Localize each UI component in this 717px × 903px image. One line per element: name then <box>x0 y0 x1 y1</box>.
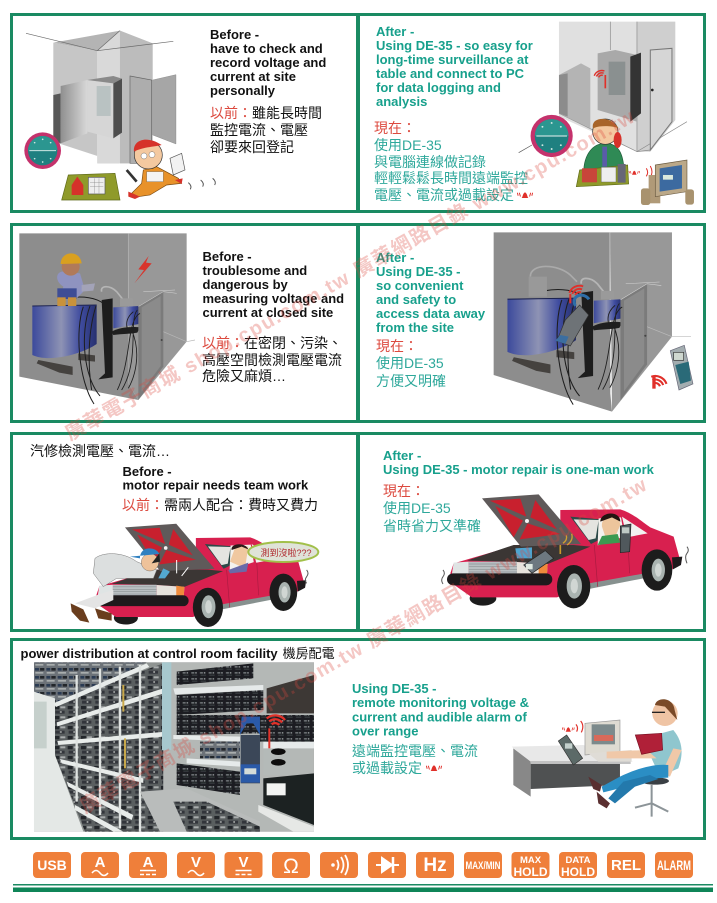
chinese description: 省時省力又準確 <box>383 518 481 534</box>
heading: after, convenient and safe: and safety to <box>376 292 456 307</box>
heading: after, convenient and safe: After - <box>376 250 414 265</box>
watermark: lower diagonal: 廣華電子商城 shop.cpu.com.tw 廣華網路目錄 www.cpu.com.tw <box>76 472 651 818</box>
illustration: car repair with two people <box>71 524 318 627</box>
chinese description: 監控電流、電壓 <box>210 122 308 138</box>
icon: AC voltage <box>177 852 215 878</box>
chinese topic line: 汽修檢測電壓、電流… <box>30 443 170 459</box>
icon: data hold: HOLD <box>561 865 595 879</box>
bottom rule <box>13 884 713 892</box>
illustration: electrical room with running technician <box>24 31 215 200</box>
chinese description: 使用DE-35 <box>383 500 451 516</box>
icon: USB: USB <box>37 857 67 873</box>
icon: continuity <box>320 852 358 878</box>
icon: max min: MAX/MIN <box>466 860 501 872</box>
heading: after, convenient and safe: Using DE-35 - <box>376 264 461 279</box>
icon: data hold <box>559 852 597 879</box>
icon: alarm <box>655 852 693 878</box>
heading: after, using DE-35: for data logging and <box>376 80 501 95</box>
icon: max hold: HOLD <box>514 865 548 879</box>
heading: using DE-35 remote monitoring: remote monitoring voltage & <box>352 695 529 710</box>
heading: before, check at site: record voltage and <box>210 55 326 70</box>
heading: using DE-35 remote monitoring: over range <box>352 724 418 738</box>
illustration: car with meter and driver <box>442 494 688 608</box>
panel: before, checking at site <box>12 14 358 212</box>
chinese description: 輕輕鬆鬆長時間遠端監控 <box>374 170 528 186</box>
chinese description: 現在： <box>374 120 416 136</box>
heading: before, check at site: have to check and <box>210 41 323 56</box>
chinese description: 以前：需兩人配合：費時又費力 <box>122 497 318 513</box>
heading: before, check at site: current at site <box>210 69 296 84</box>
heading: after, using DE-35: table and connect to PC <box>376 66 525 81</box>
illustration: worker on transformer in closed room <box>19 233 195 404</box>
speech bubble text: 測到沒啦??? <box>260 547 312 558</box>
heading: before, check at site: Before - <box>210 27 259 42</box>
icon: DC voltage <box>224 852 262 878</box>
icon: alarm bell <box>517 192 533 198</box>
heading: power distribution: power distribution at control room facility 機房配電 <box>20 646 335 661</box>
heading: after, using DE-35: Using DE-35 - so easy for <box>376 38 533 53</box>
heading: after, convenient and safe: so convenient <box>376 278 464 293</box>
icon: relative <box>607 852 645 878</box>
chinese description: 遠端監控電壓、電流 <box>352 743 478 759</box>
panel: after, one-man work <box>358 434 704 630</box>
heading: after, convenient and safe: access data away <box>376 306 486 321</box>
illustration: man at desk reading with PC <box>512 699 682 817</box>
chinese description: 以前：雖能長時間 <box>210 105 322 121</box>
chinese description: 現在： <box>383 483 425 499</box>
heading: after, one-man work: Using DE-35 - motor repair is one-man work <box>383 462 655 477</box>
heading: after, one-man work: After - <box>383 448 421 463</box>
heading: using DE-35 remote monitoring: Using DE-35 - <box>352 681 437 696</box>
heading: before, check at site: personally <box>210 83 276 98</box>
icon: resistance: Ω <box>283 855 299 878</box>
heading: after, convenient and safe: from the site <box>376 320 454 335</box>
icon: alarm: ALARM <box>657 857 691 873</box>
chinese description: 卻要來回登記 <box>210 139 294 155</box>
heading: using DE-35 remote monitoring: current and audible alarm of <box>352 710 527 724</box>
heading: before, closed site: measuring voltage and <box>202 291 344 306</box>
chinese description: 電壓、電流或過載設定 <box>374 187 514 203</box>
chinese description: 與電腦連線做記錄 <box>374 154 486 170</box>
icon: frequency: Hz <box>423 855 447 876</box>
heading: before, closed site: current at closed site <box>202 305 333 320</box>
icon: frequency <box>416 852 454 878</box>
icon: resistance <box>272 852 310 878</box>
chinese description: 危險又麻煩… <box>202 368 286 384</box>
icon: DC current: A <box>143 854 154 871</box>
icon: alarm bell <box>426 765 442 771</box>
illustration: remote monitoring from desk with PC <box>519 22 694 205</box>
panel: after, surveillance from table <box>358 14 704 212</box>
icon: DC current <box>129 852 167 878</box>
panel: before, closed site <box>12 224 358 422</box>
heading: before, closed site: Before - <box>202 249 252 264</box>
panel: before, motor repair <box>12 434 358 630</box>
heading: after, using DE-35: analysis <box>376 94 427 109</box>
chinese description: 或過載設定 <box>352 760 422 776</box>
chinese description: 現在： <box>376 338 418 354</box>
icon: relative: REL <box>611 857 641 874</box>
heading: before, closed site: dangerous by <box>202 277 289 292</box>
icon: USB <box>33 852 71 878</box>
chinese description: 使用DE-35 <box>374 137 442 153</box>
icon: AC current <box>81 852 119 878</box>
heading: before, motor repair: Before - <box>122 464 172 479</box>
icon: AC current: A <box>95 854 106 871</box>
icon: max hold <box>512 852 550 879</box>
photo: server room racks with clamp meter <box>34 662 314 832</box>
watermark: upper diagonal: 廣華電子商城 shop.cpu.com.tw 廣華網路目錄 www.cpu.com.tw <box>61 104 639 445</box>
panel: after, safe remote access <box>358 224 704 422</box>
chinese description: 高壓空間檢測電壓電流 <box>202 352 342 368</box>
icon: max min <box>464 852 502 878</box>
heading: before, motor repair: motor repair needs team work <box>122 478 309 492</box>
icon: data hold: DATA <box>566 855 591 866</box>
heading: before, closed site: troublesome and <box>202 263 307 278</box>
icon row: meter functions <box>33 852 693 879</box>
icon: max hold: MAX <box>520 855 542 866</box>
chinese description: 方便又明確 <box>376 373 446 389</box>
chinese description: 使用DE-35 <box>376 355 444 371</box>
panel: power distribution at control room <box>12 640 704 838</box>
icon: diode <box>368 852 406 878</box>
illustration: clamp meter on transformer with remote unit <box>494 232 693 412</box>
icon: AC voltage: V <box>191 854 201 871</box>
icon: DC voltage: V <box>238 854 249 871</box>
heading: after, using DE-35: After - <box>376 24 414 39</box>
chinese description: 以前：在密閉、污染、 <box>202 335 342 351</box>
heading: after, using DE-35: long-time surveillance at <box>376 52 529 67</box>
